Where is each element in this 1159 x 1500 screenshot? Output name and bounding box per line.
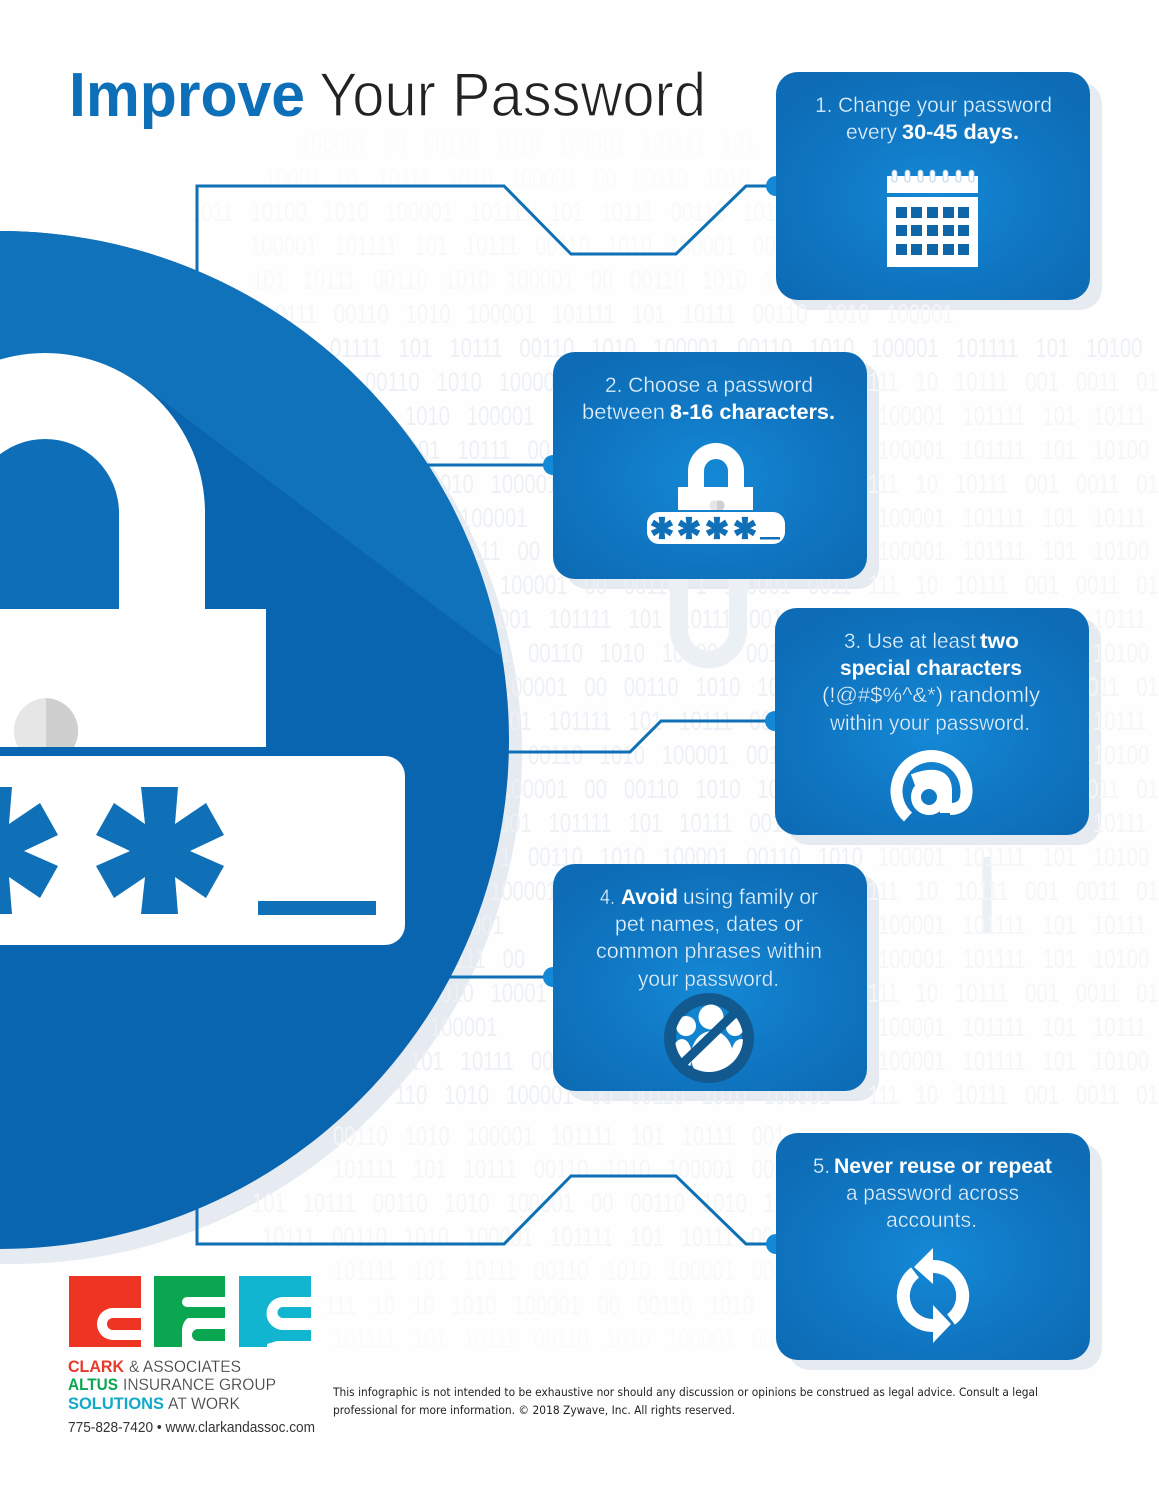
icon: refresh arrows — [903, 1248, 963, 1343]
background: binary code pattern: 1 00110 1010 100001 00110 — [500, 740, 801, 771]
background: binary code pattern: 101111 101 10111 00110 1010 100001 00 — [333, 1256, 774, 1287]
card 2: password length: between — [582, 401, 665, 424]
company name and contact: CLARK — [68, 1357, 125, 1376]
large circle with padlock illustration — [0, 231, 509, 1249]
card 5: never reuse: 5. — [813, 1155, 830, 1178]
card 1: change password — [776, 72, 1090, 300]
background: binary code pattern: 100001 101111 101 10100 — [878, 740, 1149, 771]
background: binary code pattern — [190, 129, 1159, 1355]
background: faint large lock shapes — [679, 570, 987, 933]
company name and contact: & ASSOCIATES — [129, 1357, 241, 1376]
icon: lock with password bar — [647, 443, 785, 544]
background: binary code pattern: 10111 00110 1010 100001 101111 101 10111 00 — [262, 1222, 773, 1253]
card 3: special characters — [775, 608, 1089, 835]
background: binary code pattern: 010 100001 — [440, 469, 558, 500]
background: binary code pattern: 111 00 — [470, 536, 540, 567]
background: binary code pattern: 100001 00 00110 1010 100 — [500, 672, 791, 703]
card 1: change password: 30-45 days. — [902, 121, 1019, 144]
company name and contact: SOLUTIONS — [68, 1394, 164, 1413]
company name and contact: INSURANCE GROUP — [123, 1375, 276, 1394]
underscore — [258, 901, 376, 915]
company name and contact — [68, 1357, 315, 1436]
title: Your Password — [319, 61, 706, 130]
card 2: password length: 8-16 characters. — [670, 401, 835, 424]
card 4: avoid names — [553, 864, 867, 1091]
card 1: change password: 1. Change your password — [815, 94, 1052, 117]
background: binary code pattern: 111 00 — [455, 944, 525, 975]
card 3: special characters: special characters — [840, 657, 1022, 680]
background: binary code pattern: 10001 01 10111 1010 100001 00 00110 1010 100001 — [265, 163, 835, 194]
background: binary code pattern: 100001 101111 101 10100 — [878, 944, 1149, 975]
background: binary code pattern: 001 101111 101 10111 001 — [498, 706, 783, 737]
card 4: avoid names: your password. — [638, 968, 779, 991]
card 5: never reuse: Never reuse or repeat — [834, 1155, 1052, 1178]
title — [69, 61, 706, 130]
background: binary code pattern: 1 00110 1010 100001 00110 — [500, 638, 801, 669]
background: binary code pattern: 00110 1010 100001 101111 101 10111 001 — [333, 1121, 786, 1152]
card 3: special characters: two — [980, 630, 1019, 653]
password bar — [0, 756, 405, 945]
asterisk left — [0, 787, 58, 914]
background: binary code pattern: 111 10 10 1010 100001 00 00110 1010 — [325, 1290, 754, 1321]
background: binary code pattern: 100001 101111 101 10111 00110 1010 100001 00 — [250, 231, 776, 262]
company logo mark — [69, 1276, 311, 1347]
card 2: password length — [553, 352, 867, 579]
card 3: special characters: 3. Use at least — [844, 630, 976, 653]
keyhole — [14, 698, 78, 747]
background: binary code pattern: 110 1010 100001 00 00110 1010 100001 — [395, 1080, 831, 1111]
company name and contact: ALTUS — [68, 1375, 118, 1394]
card 5: never reuse — [776, 1133, 1090, 1360]
title: Improve — [69, 61, 305, 130]
background: binary code pattern: 100001 101111 101 10100 — [878, 1046, 1149, 1077]
connector lines — [197, 186, 776, 1244]
card 3: special characters: (!@#$%^&*) randomly — [822, 684, 1041, 707]
background: binary code pattern: 0111 00110 1010 100001 101111 101 10111 00110 1010 100001 — [275, 299, 954, 330]
card 4: avoid names: Avoid — [621, 886, 678, 909]
background: binary code pattern: 100001 101111 101 10111 — [878, 910, 1146, 941]
card 2: password length: 2. Choose a password — [605, 374, 813, 397]
background: binary code pattern: 1011 10100 1010 100001 101111 101 10111 00110 1010 00 — [190, 197, 827, 228]
background: binary code pattern: 100001 — [460, 503, 528, 534]
background: binary code pattern: 100001 101111 101 10100 — [878, 536, 1149, 567]
background: binary code pattern: 01 10111 00 — [418, 435, 550, 466]
card 4: avoid names: common phrases within — [596, 940, 822, 963]
lock shackle — [0, 353, 205, 609]
card 4: avoid names: pet names, dates or — [615, 913, 803, 936]
background: binary code pattern: 100001 — [430, 1012, 498, 1043]
card 5: never reuse: a password across — [846, 1182, 1019, 1205]
card 4: avoid names: using family or — [683, 886, 818, 909]
company name and contact: AT WORK — [168, 1394, 241, 1413]
background: binary code pattern: 101 10111 00 — [410, 1046, 553, 1077]
card 5: never reuse: accounts. — [886, 1209, 977, 1232]
background: binary code pattern: 100001 101111 101 10100 — [878, 435, 1149, 466]
background: binary code pattern: 100001 — [490, 876, 558, 907]
background: binary code pattern: 100001 00 00110 1010 100001 101111 101 — [300, 129, 756, 160]
background: binary code pattern: 101 10111 00110 1010 100001 00 00110 1010 10 — [252, 265, 786, 296]
disclaimer — [332, 1385, 1038, 1417]
background: binary code pattern: 001 — [470, 910, 504, 941]
icon: calendar — [887, 170, 978, 267]
lock body — [0, 609, 266, 747]
background: binary code pattern: 100001 101111 101 10111 — [878, 1012, 1146, 1043]
background: binary code pattern: 100001 00 00110 1010 100 — [500, 774, 791, 805]
background: binary code pattern: 01111 101 10111 00110 1010 100001 00110 1010 100001 101111 101 10100 — [330, 333, 1142, 364]
company name and contact: 775-828-7420 • www.clarkandassoc.com — [68, 1420, 315, 1436]
background: binary code pattern: 1010 100001 — [405, 401, 534, 432]
background: binary code pattern: 001 101111 101 10111 001 — [498, 808, 783, 839]
background: binary code pattern: 101 10111 00110 1010 100001 00 00110 1010 10 — [252, 1188, 786, 1219]
card 4: avoid names: 4. — [600, 886, 615, 909]
background: binary code pattern: 00110 1010 100001 — [365, 367, 566, 398]
background: binary code pattern: 101111 101 10111 00110 1010 100001 00 — [333, 1324, 774, 1355]
background: binary code pattern: 1 00110 1010 100001 00110 1010 — [500, 842, 863, 873]
asterisk right — [96, 787, 224, 914]
background: binary code pattern: 010 10001 — [440, 978, 547, 1009]
icon: at sign — [897, 756, 967, 817]
connector end dots — [543, 176, 786, 1254]
disclaimer: This infographic is not intended to be exhaustive nor should any discussion or opinions be construed as legal advice. Consult a legal — [332, 1385, 1038, 1399]
background: binary code pattern: 100001 101111 101 10100 — [878, 638, 1149, 669]
background: binary code pattern: 100001 00 00110 1 100001 0011 — [500, 570, 852, 601]
background: binary code pattern: 001 101111 101 10111 001 — [498, 604, 783, 635]
card 3: special characters: within your password. — [829, 712, 1030, 735]
background: binary code pattern: 100001 101111 101 10100 — [878, 842, 1149, 873]
icon: people prohibited — [670, 999, 751, 1081]
card 1: change password: every — [846, 121, 897, 144]
background: binary code pattern: 101111 101 10111 00110 1010 100001 00 — [333, 1154, 774, 1185]
background: binary code pattern: 100001 101111 101 10111 — [878, 503, 1146, 534]
disclaimer: professional for more information. © 2018 Zywave, Inc. All rights reserved. — [333, 1403, 735, 1417]
